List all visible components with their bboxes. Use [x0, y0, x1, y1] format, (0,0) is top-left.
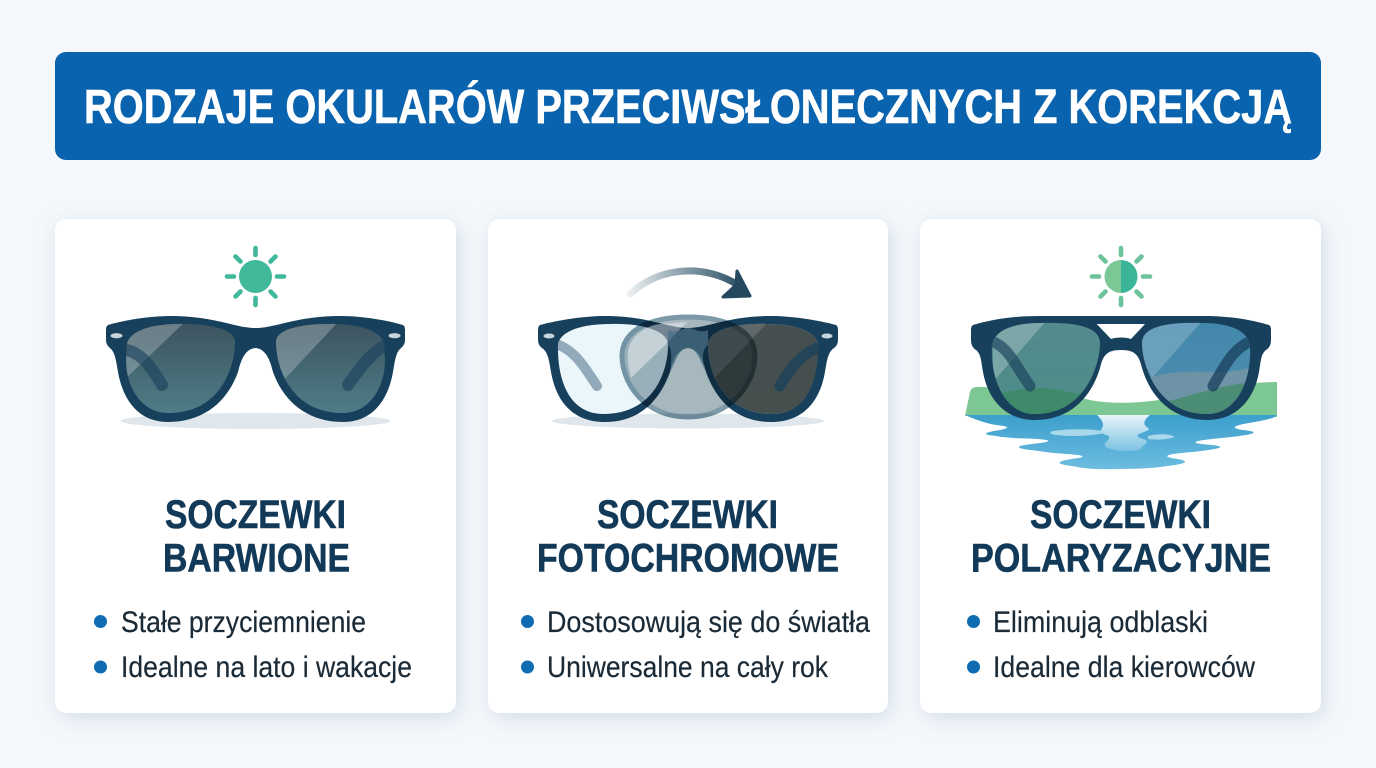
heading: FOTOCHROMOWE — [537, 536, 839, 580]
icon: tinted sunglasses — [106, 316, 405, 429]
heading: SOCZEWKI — [597, 493, 778, 537]
bullet list: Eliminują odblaski — [993, 606, 1208, 639]
panel: soczewki polaryzacyjne — [920, 219, 1321, 713]
icon: sun — [227, 248, 284, 305]
icon: photochromic sunglasses — [538, 316, 838, 428]
water reflection — [1097, 415, 1150, 451]
bullet list — [521, 606, 870, 684]
bullet list: Stałe przyciemnienie — [121, 606, 366, 639]
illustration: land and water — [965, 382, 1277, 469]
bridge seen through overlay — [668, 328, 708, 372]
heading — [163, 493, 350, 580]
heading — [971, 493, 1271, 580]
lens highlight — [628, 322, 687, 378]
bullet list: Idealne na lato i wakacje — [121, 651, 412, 684]
heading: BARWIONE — [163, 536, 350, 580]
heading — [537, 493, 839, 580]
panel: soczewki barwione — [55, 219, 456, 713]
heading: SOCZEWKI — [165, 493, 346, 537]
bullet list: Uniwersalne na cały rok — [547, 651, 829, 684]
transition lens overlay — [622, 317, 755, 417]
heading: POLARYZACYJNE — [971, 536, 1271, 580]
title banner — [55, 52, 1321, 160]
bullet list: Dostosowują się do światła — [547, 606, 870, 639]
icon: half-tone sun — [1092, 248, 1150, 305]
bullet list — [967, 606, 1255, 684]
icon: polarized sunglasses — [971, 316, 1271, 420]
bullet list — [94, 606, 412, 684]
arrow: light to dark — [630, 271, 750, 297]
bullet list: Idealne dla kierowców — [993, 651, 1255, 684]
panel: soczewki fotochromowe — [488, 219, 888, 713]
heading: SOCZEWKI — [1030, 493, 1211, 537]
